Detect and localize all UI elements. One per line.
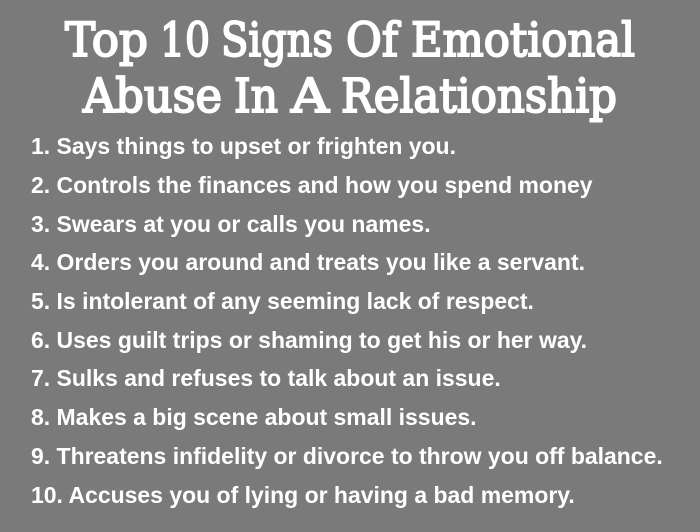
- list of signs: 2. Controls the finances and how you spend money: [31, 172, 593, 198]
- title: A: [290, 69, 330, 124]
- title: [64, 13, 635, 124]
- list of signs: 5. Is intolerant of any seeming lack of respect.: [31, 288, 534, 314]
- title: Abuse: [82, 69, 222, 124]
- list of signs: 9. Threatens infidelity or divorce to throw you off balance.: [31, 443, 663, 469]
- list of signs: 3. Swears at you or calls you names.: [31, 211, 431, 237]
- title: 10: [160, 13, 210, 68]
- list of signs: 7. Sulks and refuses to talk about an issue.: [31, 365, 501, 391]
- title: Of: [346, 13, 401, 68]
- title: Emotional: [411, 13, 635, 68]
- title: Top: [65, 13, 148, 68]
- list of signs: 6. Uses guilt trips or shaming to get his or her way.: [31, 327, 587, 353]
- title: Relationship: [341, 69, 617, 124]
- list of signs: 10. Accuses you of lying or having a bad memory.: [31, 482, 575, 508]
- list of signs: 1. Says things to upset or frighten you.: [31, 133, 456, 159]
- title: Signs: [221, 13, 333, 68]
- list of signs: 8. Makes a big scene about small issues.: [31, 404, 477, 430]
- title: In: [234, 69, 278, 124]
- list of signs: [31, 133, 663, 508]
- list of signs: 4. Orders you around and treats you like a servant.: [31, 249, 585, 275]
